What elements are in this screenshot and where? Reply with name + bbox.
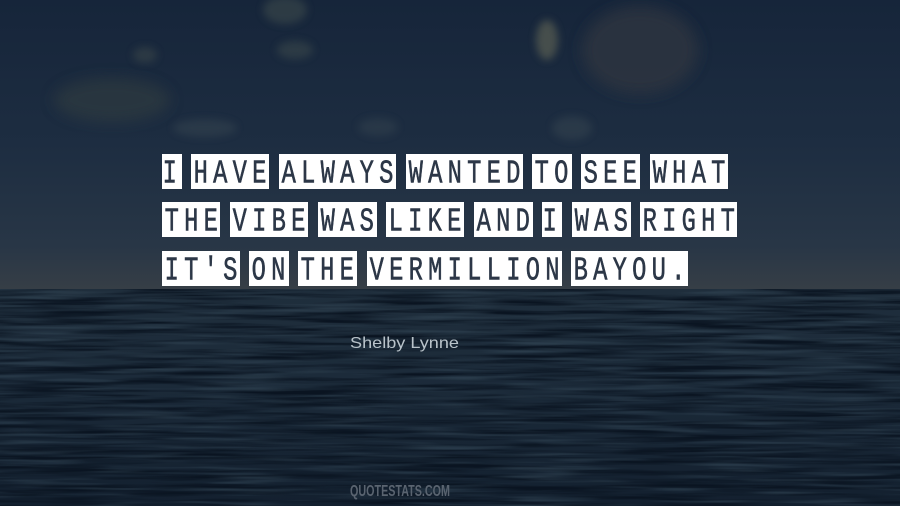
quote: line 2: WAS bbox=[575, 203, 633, 241]
quote: line 2: VIBE bbox=[233, 203, 311, 241]
quote: line 1 bbox=[162, 154, 731, 193]
quote: line 3: IT'S bbox=[165, 252, 243, 290]
quote: line 1: WANTED bbox=[409, 155, 526, 193]
quote: line 2: WAS bbox=[321, 203, 379, 241]
quote: line 1: WHAT bbox=[653, 155, 731, 193]
quote: line 3: VERMILLION bbox=[370, 252, 565, 290]
quote: line 3: ON bbox=[252, 252, 291, 290]
quote: line 2: I bbox=[543, 203, 562, 241]
quote: line 1: HAVE bbox=[194, 155, 272, 193]
quote: line 1: I bbox=[163, 155, 182, 193]
quote: line 3: BAYOU. bbox=[574, 252, 691, 290]
quote: line 2: LIKE bbox=[389, 203, 467, 241]
clouds bbox=[54, 0, 698, 140]
quote: line 3 bbox=[162, 251, 691, 290]
quote: line 2: AND bbox=[477, 203, 535, 241]
background: night sky bbox=[0, 0, 900, 289]
background: sea bbox=[0, 289, 900, 506]
quote: line 2: THE bbox=[165, 203, 223, 241]
quote: line 2 bbox=[162, 202, 740, 241]
watermark: QUOTESTATS.COM bbox=[350, 483, 450, 500]
quote: line 1: TO bbox=[535, 155, 574, 193]
quote: line 2: RIGHT bbox=[643, 203, 740, 241]
author name: Shelby Lynne bbox=[350, 335, 459, 352]
quote: line 1: ALWAYS bbox=[282, 155, 399, 193]
quote: line 3: THE bbox=[301, 252, 359, 290]
quote: line 1: SEE bbox=[584, 155, 642, 193]
